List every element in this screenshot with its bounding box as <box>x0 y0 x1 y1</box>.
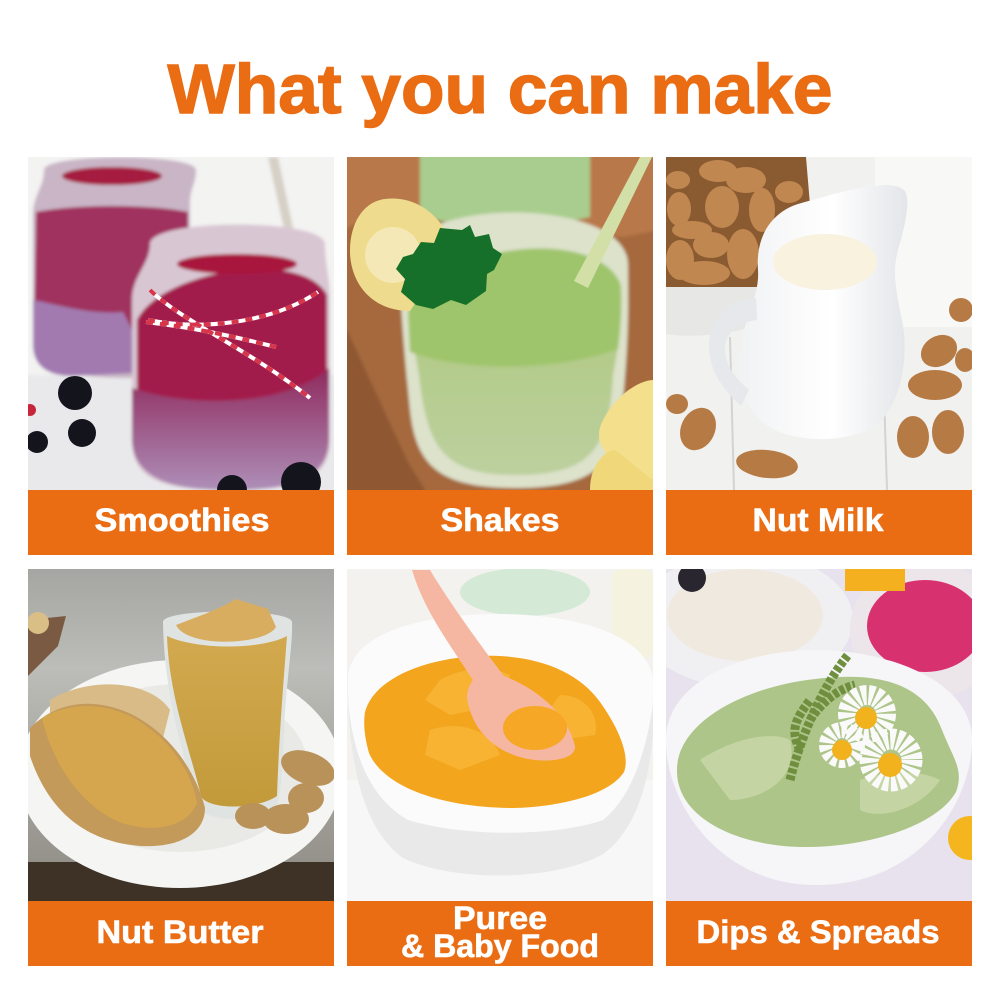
photo: milk jug with almonds <box>666 157 975 490</box>
panel: puree and baby food <box>347 568 653 966</box>
photo: orange puree in white bowl <box>347 568 653 901</box>
label bar: nut butter: Nut Butter <box>96 914 264 950</box>
label bar: puree and baby food: Puree <box>453 900 547 936</box>
label bar: nut milk: Nut Milk <box>752 502 884 538</box>
label bar: smoothies <box>28 490 334 555</box>
label bar: dips and spreads: Dips & Spreads <box>696 914 940 950</box>
icon: microgreens <box>790 655 855 780</box>
photo: green dip with daisies <box>666 569 972 901</box>
label bar: dips and spreads <box>666 901 972 966</box>
label bar: shakes: Shakes <box>440 502 560 538</box>
photo: green shake with banana <box>347 157 653 490</box>
photo: berry smoothie jars <box>28 157 334 490</box>
panel: nut milk <box>666 157 975 555</box>
label bar: puree and baby food <box>347 900 653 966</box>
panel: nut butter <box>18 569 342 966</box>
label bar: puree and baby food: & Baby Food <box>401 928 599 964</box>
title: What you can make <box>168 50 832 128</box>
label bar: nut milk <box>666 490 972 555</box>
icon: daisies <box>827 695 912 781</box>
label bar: nut butter <box>28 901 334 966</box>
label bar: smoothies: Smoothies <box>94 502 270 538</box>
panel: shakes <box>347 157 653 555</box>
photo: peanut butter on bread <box>18 569 342 901</box>
panel: dips and spreads <box>666 569 972 966</box>
panel: smoothies <box>28 157 334 555</box>
label bar: shakes <box>347 490 653 555</box>
